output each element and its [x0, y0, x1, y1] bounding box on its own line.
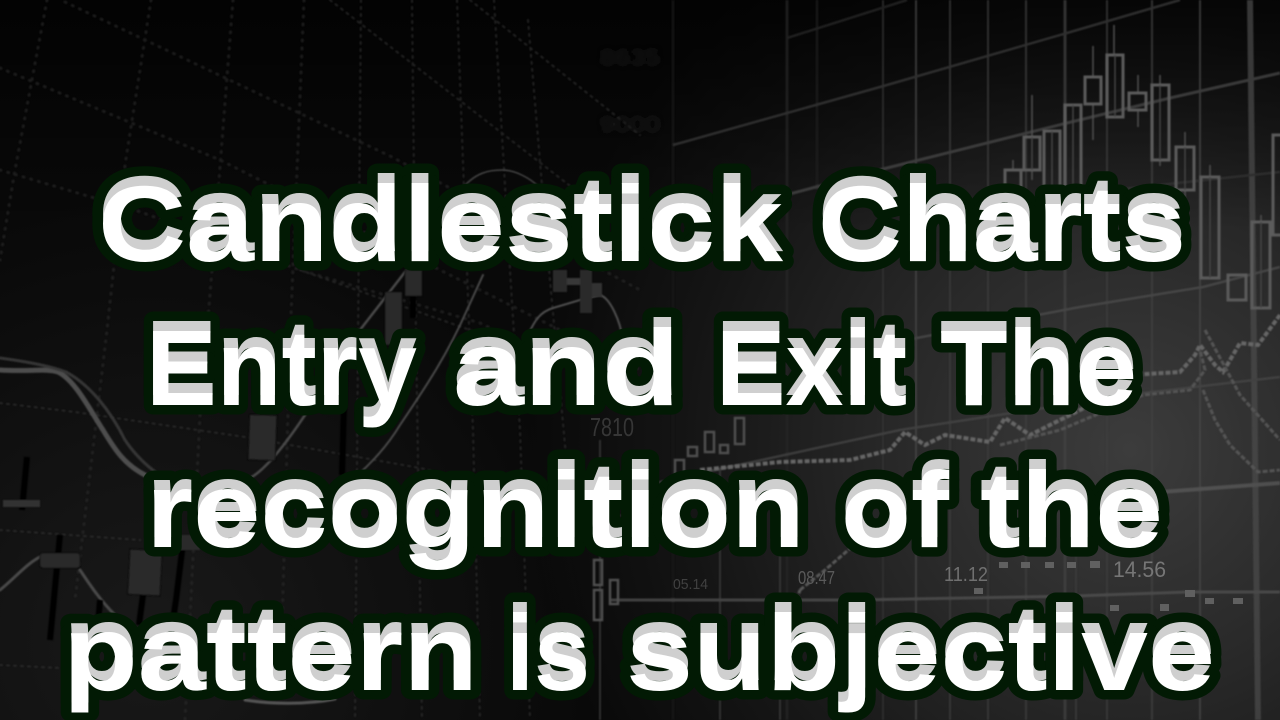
title text: line 1: Candlestick [98, 163, 784, 284]
title text: line 2: The [940, 297, 1137, 418]
title text: line 4: is [506, 582, 590, 703]
title text: line 3: the [980, 439, 1163, 560]
title text: line 2: and [453, 307, 680, 428]
title text: line 3: of [841, 449, 950, 570]
title text: line 4: pattern [63, 582, 478, 703]
left dotted perspective grid [0, 0, 640, 720]
title text: line 3: the [980, 449, 1163, 570]
title text: line 2: Entry [146, 297, 417, 418]
title text: line 2: Entry [146, 307, 417, 428]
title text: line 3: the [980, 439, 1163, 560]
title text: line 1: Charts [818, 153, 1186, 274]
chart price labels: 7810 [590, 412, 634, 442]
title text: line 2: and [453, 297, 680, 418]
title text: line 3: recognition [146, 449, 805, 570]
title text: line 2: Exit [716, 297, 907, 418]
left curves [0, 170, 623, 703]
title text: line 4 [63, 582, 1215, 713]
title text: line 3: recognition [146, 439, 805, 560]
right chart grid [600, 0, 1280, 720]
title text: line 3 [146, 439, 1163, 570]
title text: line 2: Exit [716, 307, 907, 428]
title text: line 2: and [453, 307, 680, 428]
title text: line 2: Exit [716, 307, 907, 428]
title text: line 3: of [841, 449, 950, 570]
title text: line 4: subjective [626, 582, 1215, 703]
title text: line 1: Charts [818, 163, 1186, 284]
title text: line 2 [146, 297, 1137, 428]
title text: line 4: is [506, 592, 590, 713]
chart price labels [590, 45, 1166, 593]
title text: line 2: The [940, 307, 1137, 428]
title text: line 4: pattern [63, 592, 478, 713]
title text: line 1: Candlestick [98, 163, 784, 284]
title text: line 3: of [841, 439, 950, 560]
chart price labels: 08.47 [798, 568, 835, 588]
title text: line 2: Entry [146, 297, 417, 418]
title text: line 3: the [980, 449, 1163, 570]
title text: line 3: recognition [146, 449, 805, 570]
title text: line 4: subjective [626, 592, 1215, 713]
title text: line 1: Candlestick [98, 153, 784, 274]
title text: line 4: subjective [626, 592, 1215, 713]
title text: line 1: Charts [818, 163, 1186, 284]
right hollow candlesticks [594, 25, 1280, 620]
title text: line 4: pattern [63, 592, 478, 713]
chart price labels: 11.12 [944, 564, 988, 586]
left candlesticks [3, 270, 602, 640]
title text: line 1: Candlestick [98, 153, 784, 274]
chart price labels: 14.56 [1113, 557, 1166, 582]
title text: line 2: Entry [146, 307, 417, 428]
title text: line 2: and [453, 297, 680, 418]
title text: line 3: recognition [146, 439, 805, 560]
title text: line 1: Charts [818, 153, 1186, 274]
right price lines [700, 315, 1280, 620]
title text: line 4: pattern [63, 582, 478, 703]
chart price labels: 05.14 [673, 576, 708, 593]
chart price labels: 8635 [600, 45, 660, 70]
title text: line 3: of [841, 439, 950, 560]
title text: line 2: Exit [716, 297, 907, 418]
title text: line 4: subjective [626, 582, 1215, 703]
chart price labels: 9000 [600, 112, 660, 137]
chart marker dots [974, 561, 1243, 611]
title text: line 4: is [506, 582, 590, 703]
title text: line 2: The [940, 297, 1137, 418]
title text: line 4: is [506, 592, 590, 713]
title text: line 2: The [940, 307, 1137, 428]
title text: line 1 [98, 153, 1186, 284]
